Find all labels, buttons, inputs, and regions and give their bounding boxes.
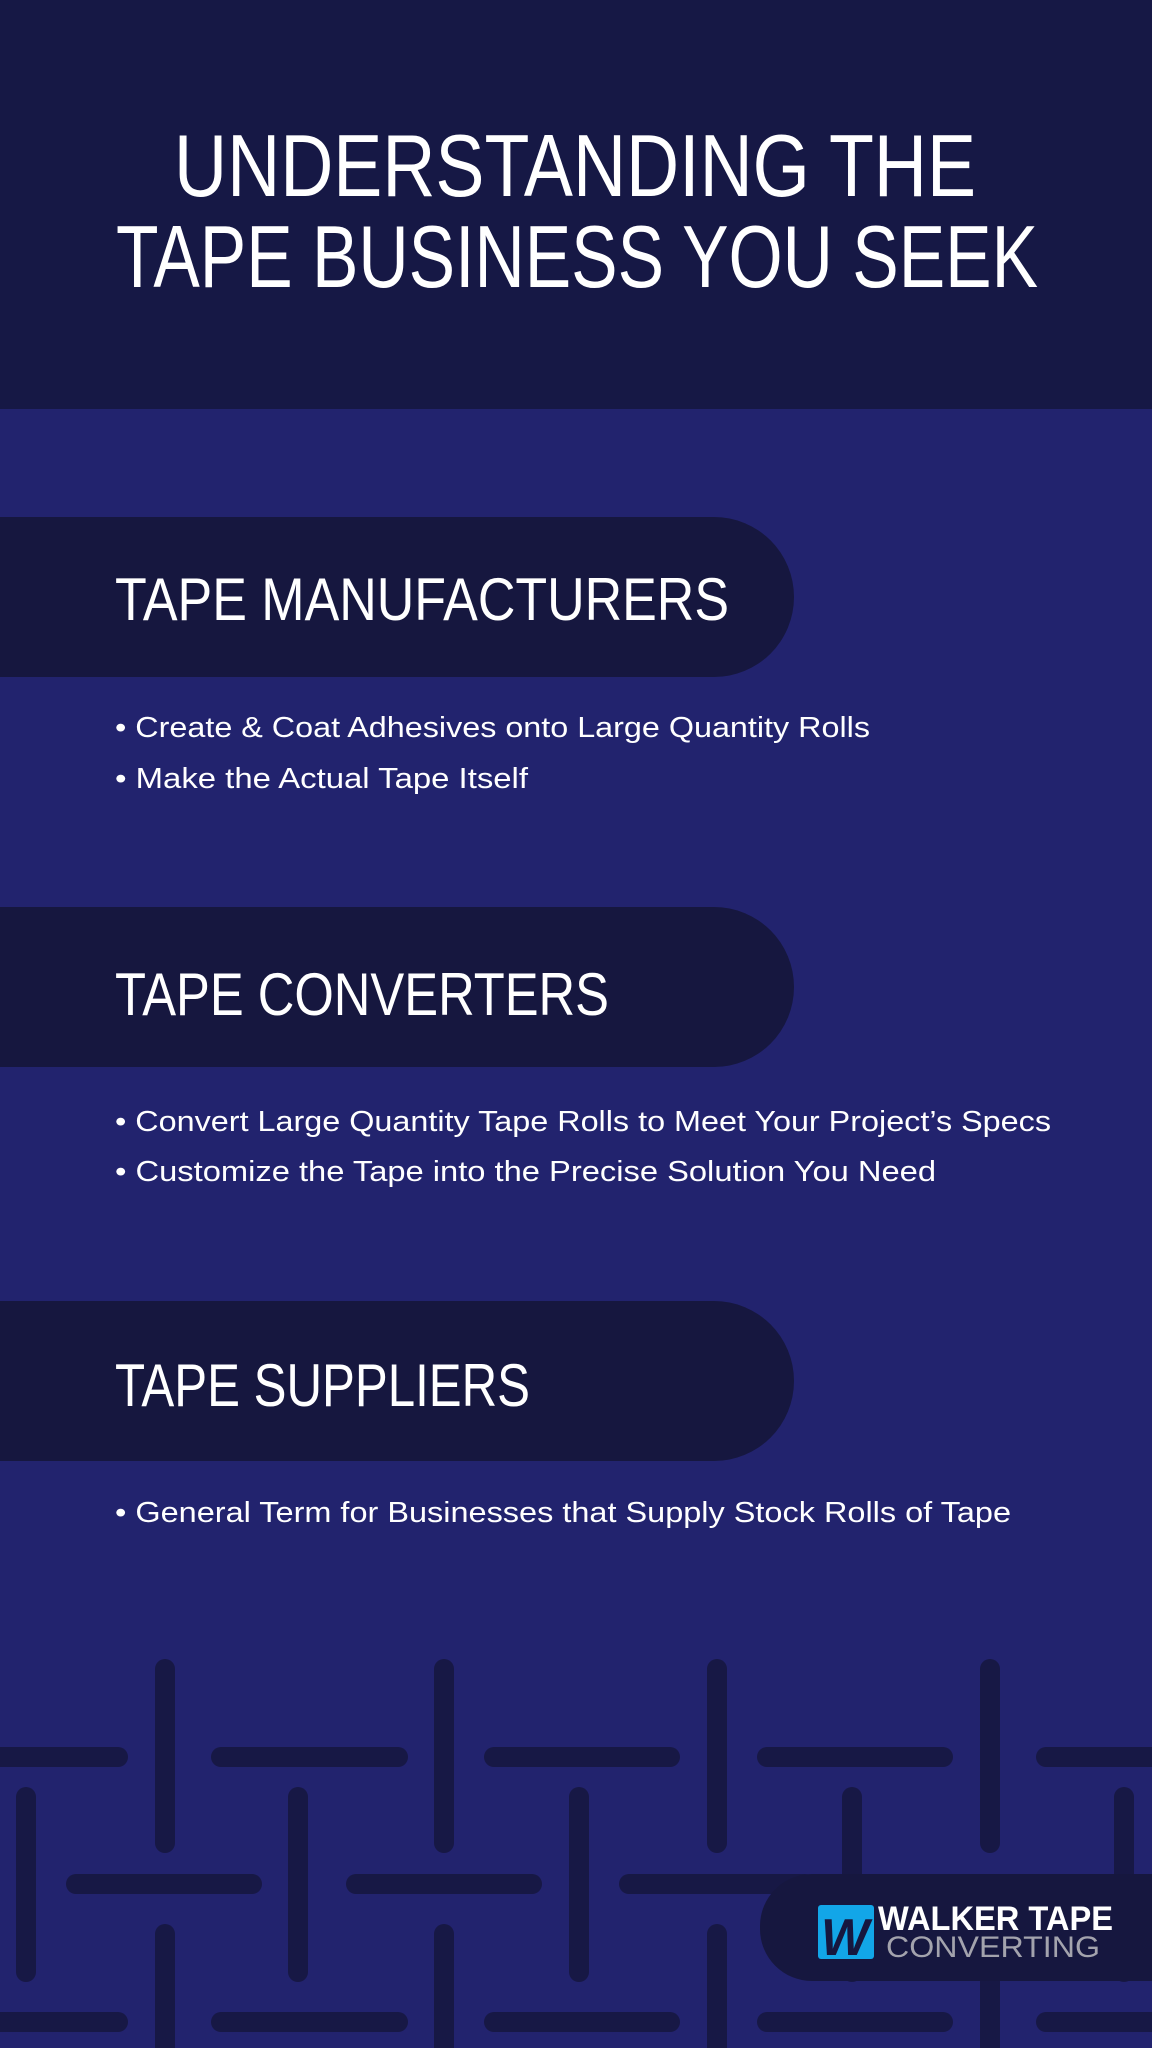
logo: walker tape converting: WALKER TAPE (878, 1900, 1113, 1938)
heading pill: converters: TAPE CONVERTERS (115, 961, 609, 1028)
background pattern (0, 1659, 1152, 2048)
bullets: manufacturers: • Make the Actual Tape Itself (115, 763, 529, 795)
heading pill: converters (0, 907, 794, 1067)
logo: walker tape converting: CONVERTING (886, 1931, 1100, 1964)
heading pill: manufacturers (0, 517, 794, 677)
bullets: suppliers: • General Term for Businesses that Supply Stock Rolls of Tape (115, 1497, 1011, 1529)
bullets: converters: • Customize the Tape into the Precise Solution You Need (115, 1156, 936, 1188)
bullets: converters (115, 1106, 1051, 1188)
heading pill: suppliers (0, 1301, 794, 1461)
title: UNDERSTANDING THE (174, 116, 976, 215)
title (116, 116, 1038, 306)
bullets: manufacturers: • Create & Coat Adhesives onto Large Quantity Rolls (115, 712, 870, 744)
header band (0, 0, 1152, 409)
panel: tape manufacturers (0, 517, 870, 795)
icon: W box: W (821, 1909, 873, 1967)
logo: walker tape converting (760, 1874, 1152, 1981)
panel: tape suppliers (0, 1301, 1011, 1529)
bullets: manufacturers (115, 712, 870, 795)
heading pill: suppliers: TAPE SUPPLIERS (115, 1352, 530, 1419)
panel: tape converters (0, 907, 1051, 1188)
bullets: converters: • Convert Large Quantity Tape Rolls to Meet Your Project’s Specs (115, 1106, 1051, 1138)
heading pill: manufacturers: TAPE MANUFACTURERS (115, 566, 729, 633)
